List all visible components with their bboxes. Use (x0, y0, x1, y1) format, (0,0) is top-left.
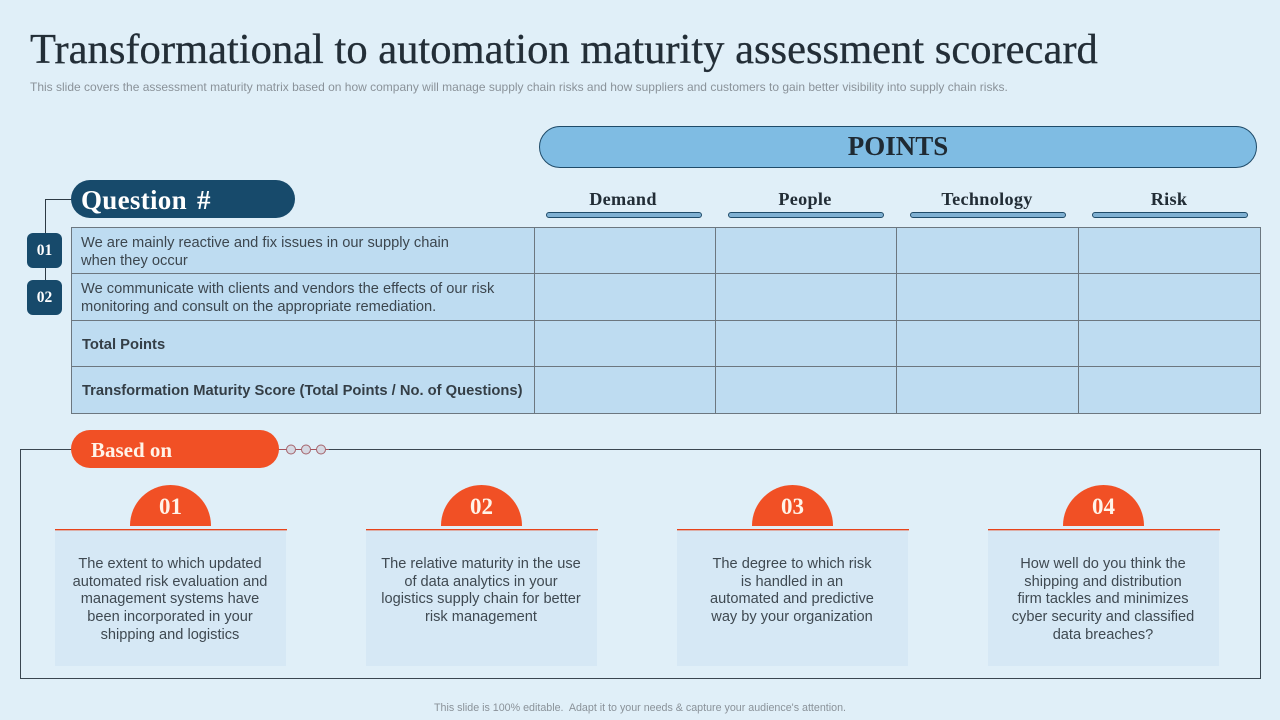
points banner (539, 126, 1257, 168)
heading: people: People (778, 189, 832, 209)
row text: maturity score: Transformation Maturity Score (Total Points / No. of Questions) (82, 383, 523, 399)
card text 1: been incorporated in your (87, 609, 253, 625)
badge: 02 (27, 280, 62, 315)
decorative dots (279, 444, 329, 454)
card 2 (366, 485, 598, 666)
heading: demand: Demand (589, 189, 657, 209)
number tab 03 (752, 485, 833, 526)
card 3 (677, 485, 909, 666)
card 4 (988, 485, 1220, 666)
card text 2 (381, 556, 581, 625)
row text: question 1: when they occur (81, 253, 188, 269)
row text: question 2: We communicate with clients and vendors the effects of our risk (81, 281, 494, 297)
badge: 02: 02 (37, 289, 52, 306)
card text 3: The degree to which risk (712, 556, 872, 572)
row text: question 2 (81, 281, 494, 315)
row text: total points: Total Points (82, 337, 165, 353)
subtitle text: This slide covers the assessment maturity matrix based on how company will manage supply chain risks and how suppliers and customers to gain better visibility into supply chain risks. (30, 80, 1008, 94)
connector line for question numbers (45, 199, 72, 315)
card 1 (55, 485, 287, 666)
card text 1: automated risk evaluation and (73, 574, 267, 590)
number tab 01 (130, 485, 211, 526)
number tab 01: 01 (159, 494, 182, 519)
question heading pill (71, 180, 295, 218)
heading: risk: Risk (1151, 189, 1187, 209)
card text 3: is handled in an (741, 574, 843, 590)
card text 4: firm tackles and minimizes (1017, 591, 1189, 607)
card text 4: data breaches? (1053, 627, 1153, 643)
heading: technology: Technology (941, 189, 1033, 209)
card text 4: How well do you think the (1020, 556, 1186, 572)
row text: question 1: We are mainly reactive and fix issues in our supply chain (81, 235, 449, 251)
based on pill (71, 430, 279, 468)
row text: question 2: monitoring and consult on the appropriate remediation. (81, 299, 436, 315)
card text 4: cyber security and classified (1012, 609, 1194, 625)
card text 2: risk management (425, 609, 537, 625)
number tab 02: 02 (470, 494, 493, 519)
card text 4 (1012, 556, 1194, 643)
badge: 01: 01 (37, 242, 52, 259)
column headings (546, 189, 1248, 218)
card text 1: The extent to which updated (78, 556, 262, 572)
card text 4: shipping and distribution (1024, 574, 1182, 590)
card text 1: management systems have (81, 591, 259, 607)
number tab 03: 03 (781, 494, 804, 519)
card text 2: of data analytics in your (404, 574, 558, 590)
card text 1: shipping and logistics (101, 627, 239, 643)
card text 2: logistics supply chain for better (381, 591, 581, 607)
card text 3: way by your organization (711, 609, 873, 625)
number tab 04 (1063, 485, 1144, 526)
row text: question 1 (81, 235, 449, 269)
footer note: This slide is 100% editable. Adapt it to your needs & capture your audience's attention. (434, 702, 846, 714)
based on pill: Based on (91, 438, 172, 462)
card text 3 (710, 556, 874, 625)
question heading pill: Question # (81, 185, 211, 215)
scorecard table (71, 227, 1261, 414)
card text 3: automated and predictive (710, 591, 874, 607)
points banner: POINTS (848, 131, 948, 161)
card text 2: The relative maturity in the use (381, 556, 581, 572)
card text 1 (73, 556, 267, 643)
number tab 04: 04 (1092, 494, 1115, 519)
number tab 02 (441, 485, 522, 526)
based on outline frame (20, 449, 1261, 679)
badge: 01 (27, 233, 62, 268)
title: Transformational to automation maturity assessment scorecard (30, 26, 1098, 73)
